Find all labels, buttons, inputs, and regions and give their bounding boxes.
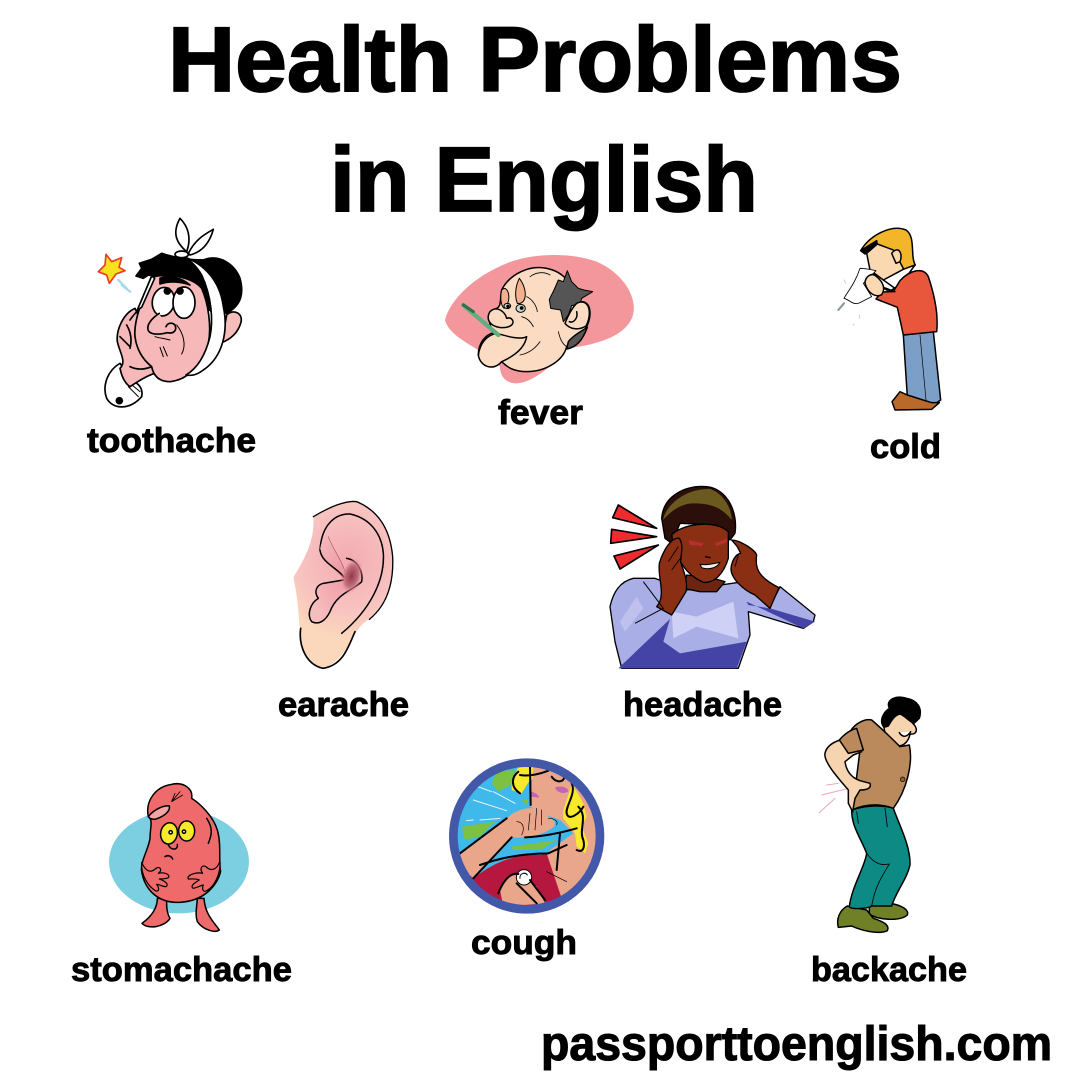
panel: cough xyxy=(453,762,601,962)
label: backache: backache xyxy=(811,951,967,989)
label: fever: fever xyxy=(498,394,583,432)
icon: man with toothache xyxy=(98,218,242,407)
title: Health Problems xyxy=(168,9,902,111)
icon: person holding head with pain marks xyxy=(610,486,815,668)
title xyxy=(168,9,902,231)
panel: headache xyxy=(610,486,815,724)
panel: stomachache xyxy=(71,784,292,989)
panel: toothache xyxy=(87,218,256,460)
label: headache: headache xyxy=(623,686,782,724)
icon: man holding his back xyxy=(819,697,920,932)
label: earache: earache xyxy=(278,686,409,724)
website address: passporttoenglish.com xyxy=(541,1018,1052,1071)
icon: painful ear xyxy=(293,501,393,668)
icon detail: red pain marks xyxy=(611,505,658,569)
label: cough: cough xyxy=(471,924,577,962)
panel: fever xyxy=(445,255,634,432)
label: stomachache: stomachache xyxy=(71,951,292,989)
panel: backache xyxy=(811,697,967,989)
panel: earache xyxy=(278,501,409,724)
icon: stomach character xyxy=(109,784,249,931)
label: toothache: toothache xyxy=(87,422,256,460)
title: in English xyxy=(330,129,758,231)
icon: sick man with thermometer xyxy=(445,255,634,383)
icon: woman coughing in round badge xyxy=(453,762,601,910)
icon: boy blowing his nose xyxy=(838,228,941,410)
panel: cold xyxy=(838,228,941,466)
label: cold: cold xyxy=(870,428,941,466)
